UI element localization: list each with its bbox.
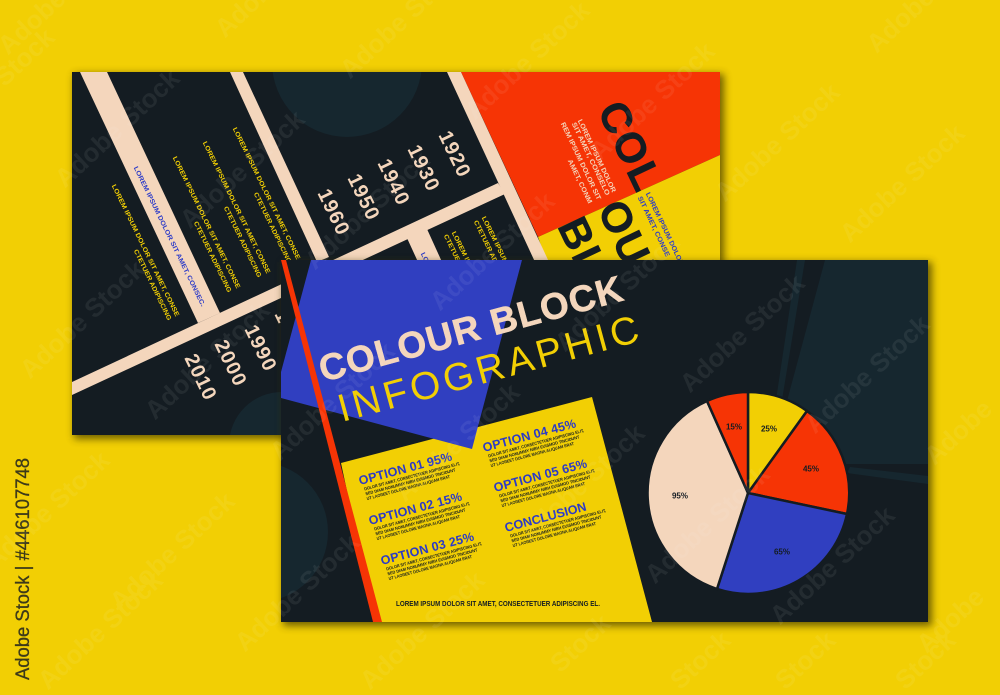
watermarks: Adobe Stock (229, 526, 366, 657)
pie chart: 65% (774, 548, 790, 556)
panel: back slide: CTETUER ADIPISCING (192, 220, 232, 294)
option 05 (492, 455, 598, 509)
option 05: UT LAOREET DOLORE MAGNA ALIQUAM ERAT (501, 481, 586, 508)
watermarks: Adobe Stock (514, 417, 651, 548)
panel: back slide: COL (589, 94, 672, 199)
panel: back slide: LOREM IPSUM DOLOR SIT AMET, CONSE (231, 126, 301, 261)
option 01: OPTION 01 95% (357, 450, 454, 488)
watermarks: Adobe Stock (354, 564, 491, 695)
panel: back slide: 1990 (240, 322, 280, 374)
title: INFOGRAPHIC (333, 308, 644, 431)
watermarks: Adobe Stock (424, 185, 561, 316)
panel: back slide: CTETUER ADIPISCING (252, 191, 292, 265)
watermarks: Adobe Stock (389, 376, 526, 507)
pie chart: 15% (726, 422, 742, 432)
watermarks: Stock (544, 608, 617, 678)
pie chart (648, 392, 849, 594)
watermarks: Adobe Stock (14, 253, 151, 384)
panel: back slide: AMET, CONM (566, 158, 593, 205)
option 02: UT LAOREET DOLORE MAGNA ALIQUAM ERAT (376, 514, 461, 541)
watermarks: Adobe Stock (549, 226, 686, 357)
panel: back slide: 1950 (343, 171, 383, 223)
option 01: DOLOR SIT AMET, CONSECTETUER ADIPISCING ELIT, (364, 461, 460, 491)
panel: back slide: CTETUER ADIPISCING (472, 219, 512, 293)
panel: back slide: REM IPSUM DOLOR SIT (559, 121, 602, 202)
conclusion: DOLOR SIT AMET, CONSECTETUER ADIPISCING ELIT, (510, 508, 606, 538)
conclusion (503, 495, 609, 549)
watermarks: Adobe Stock (799, 308, 936, 439)
watermarks: Adobe Stock (299, 144, 436, 275)
option 03: UT LAOREET DOLORE MAGNA ALIQUAM ERAT (388, 554, 473, 581)
watermarks: Adobe Stock (834, 117, 971, 248)
panel: back slide: 1940 (373, 156, 413, 208)
panel: back slide: 1980 (270, 307, 310, 359)
panel: back slide: LOREM IPSUM DOLOR SIT AMET, CONSE (201, 140, 271, 275)
watermarks: Adobe Stock (49, 62, 186, 193)
panel: back slide: SIT AMET, CONSELO (570, 121, 611, 197)
panel: back slide: LOREM IPSUM DOLOR (576, 118, 617, 194)
option 02: SED DIAM NONUMMY NIBH EUISMOD TINCIDUNT (375, 507, 466, 536)
option 02: OPTION 02 15% (367, 490, 464, 528)
pie chart: 45% (803, 464, 819, 474)
watermarks: Stock (889, 625, 962, 695)
watermarks: Adobe Stock (264, 335, 401, 466)
panel: back slide: LOREM IPSUM DOLOR (644, 191, 685, 267)
panel: back slide (68, 68, 730, 445)
option 01: SED DIAM NONUMMY NIBH EUISMOD TINCIDUNT (365, 467, 456, 496)
option 03: SED DIAM NONUMMY NIBH EUISMOD TINCIDUNT (387, 547, 478, 576)
watermarks: Adobe (910, 581, 990, 659)
pie chart: 95% (672, 492, 688, 500)
watermarks: Adobe Stock (709, 76, 846, 207)
panel: back slide: LOREM IPSUM DOLOR SIT AMET, CONSE (110, 183, 180, 318)
panel: back slide: SIT AMET, CONSE (636, 195, 671, 259)
panel: back slide: CTETUER ADIPISCING (132, 248, 172, 322)
panel: back slide: OUR (589, 193, 674, 303)
pie chart: 25% (761, 424, 777, 434)
conclusion: CONCLUSION (503, 500, 588, 535)
option 01 (357, 448, 463, 502)
option 03 (379, 528, 485, 582)
conclusion: UT LAOREET DOLORE MAGNA ALIQUAM ERAT (512, 521, 597, 548)
conclusion: SED DIAM NONUMMY NIBH EUISMOD TINCIDUNT (511, 514, 602, 543)
panel: back slide: CTETUER ADIPISCING (222, 205, 262, 279)
option 02 (367, 488, 473, 542)
watermarks: Adobe (918, 393, 998, 471)
watermarks: Adobe Stock (674, 267, 811, 398)
watermarks: Adobe Stock (32, 564, 169, 695)
title: COLOUR BLOCK (314, 268, 627, 390)
panel: back slide: 2000 (210, 337, 250, 389)
watermarks: Stock (664, 625, 737, 695)
panel: back slide: LOREM IPSUM DOLOR SIT AMET, CONSEC. (419, 251, 493, 394)
panel: back slide: 2010 (180, 351, 220, 403)
option 04: DOLOR SIT AMET, CONSECTETUER ADIPISCING ELIT, (488, 428, 584, 458)
stock id label: Adobe Stock | #446107748 (13, 458, 34, 680)
panel: back slide: CTETUER ADIPISCING (442, 233, 482, 307)
panel: back slide: 1960 (313, 186, 353, 238)
panel: back slide: LOREM IPSUM DOLOR SIT AMET, CONSE (480, 215, 550, 350)
watermarks: Stock (769, 625, 842, 695)
option 04: SED DIAM NONUMMY NIBH EUISMOD TINCIDUNT (489, 434, 580, 463)
option 02: DOLOR SIT AMET, CONSECTETUER ADIPISCING ELIT, (374, 501, 470, 531)
panel: back slide: BLOCK (549, 210, 660, 374)
panel: back slide: 1920 (434, 128, 474, 180)
footer text: LOREM IPSUM DOLOR SIT AMET, CONSECTETUER ADIPISCING EL. (396, 601, 600, 608)
option 01: UT LAOREET DOLORE MAGNA ALIQUAM ERAT (366, 474, 451, 501)
option 05: SED DIAM NONUMMY NIBH EUISMOD TINCIDUNT (500, 474, 591, 503)
panel: back slide: LOREM IPSUM DOLOR SIT AMET, CONSE (450, 230, 520, 365)
option 04 (481, 415, 587, 469)
option 03: DOLOR SIT AMET, CONSECTETUER ADIPISCING ELIT, (386, 541, 482, 571)
option 04: UT LAOREET DOLORE MAGNA ALIQUAM ERAT (490, 441, 575, 468)
panel: back slide: LOREM IPSUM DOLOR SIT AMET, CONSEC. (132, 165, 206, 308)
watermarks: Adobe Stock (584, 35, 721, 166)
panel: back slide: LOREM IPSUM DOLOR SIT AMET, CONSE (171, 155, 241, 290)
option 04: OPTION 04 45% (481, 417, 578, 455)
watermarks: Adobe Stock (139, 294, 276, 425)
panel: back slide: 1930 (403, 142, 443, 194)
panel: front slide (188, 260, 932, 626)
option 03: OPTION 03 25% (379, 530, 476, 568)
watermarks: Adobe Stock (174, 103, 311, 234)
option 05: OPTION 05 65% (492, 457, 589, 495)
watermarks: Adobe Stock (639, 458, 776, 589)
watermarks: Adobe Stock (104, 485, 241, 616)
watermarks: Adobe Stock (764, 499, 901, 630)
option 05: DOLOR SIT AMET, CONSECTETUER ADIPISCING ELIT, (499, 468, 595, 498)
